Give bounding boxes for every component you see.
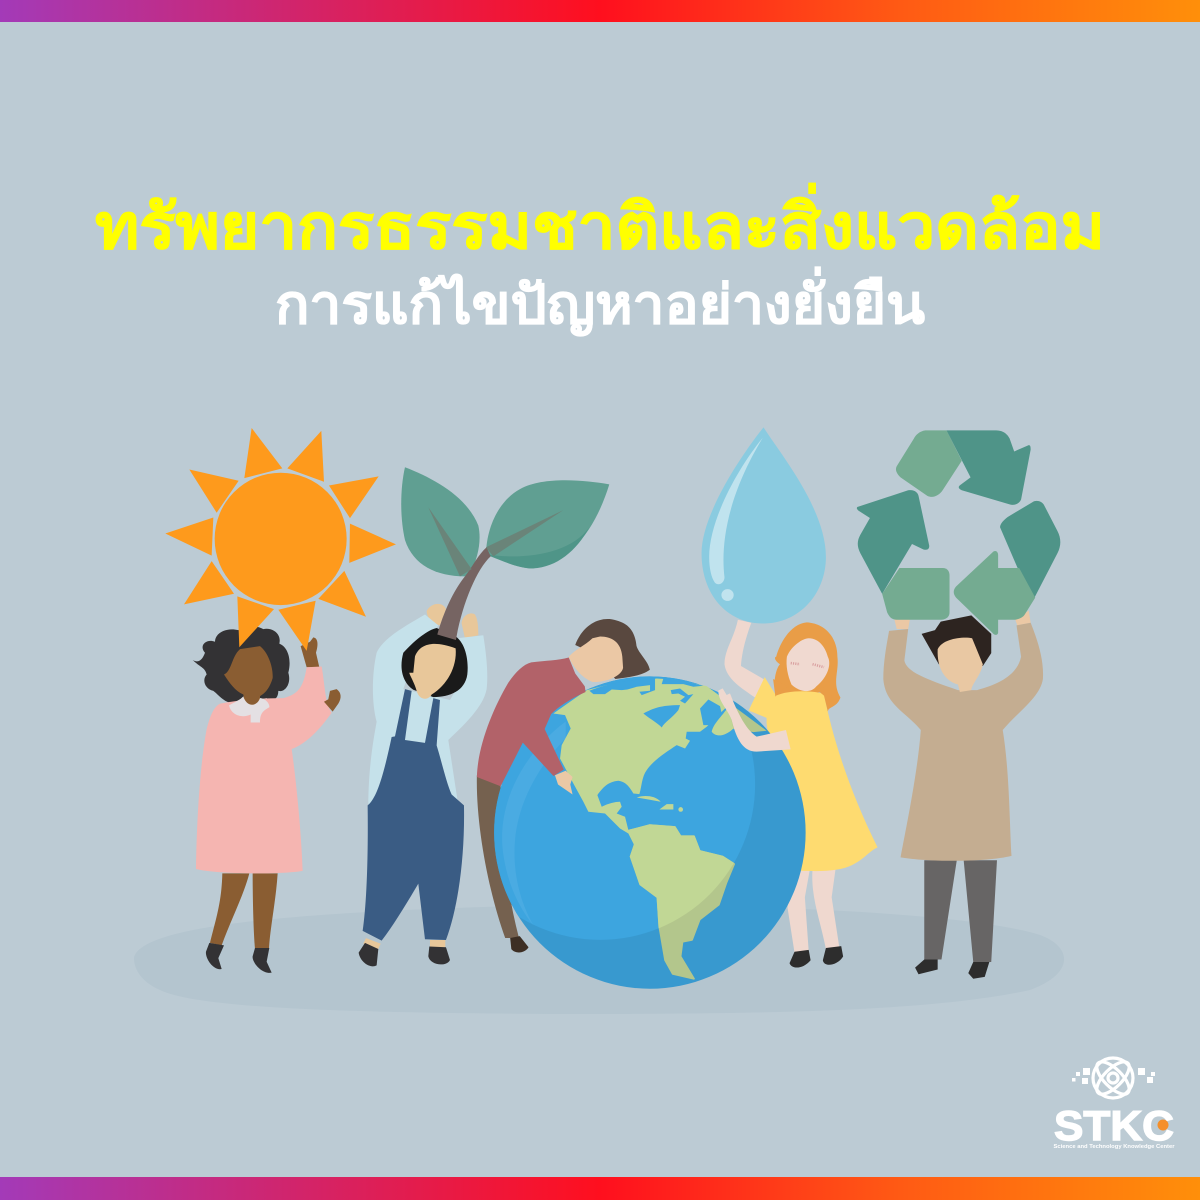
south america shaded	[629, 825, 734, 979]
legs	[788, 870, 839, 953]
left arrow tail	[882, 568, 950, 620]
dress	[749, 677, 878, 871]
right arrow tail	[1000, 501, 1060, 598]
top gradient bar	[0, 0, 1200, 22]
right arrow head	[954, 551, 1035, 635]
drop glint	[721, 589, 734, 601]
dress	[196, 667, 332, 873]
face	[787, 638, 829, 691]
sun rays	[165, 428, 396, 651]
ocean shadow	[494, 676, 806, 989]
hair strands over dress	[773, 679, 834, 712]
hair	[922, 615, 991, 666]
top arrow tail	[896, 430, 962, 497]
shirt	[477, 658, 586, 786]
hair	[775, 622, 840, 710]
trousers	[477, 775, 519, 938]
collar	[229, 696, 269, 723]
shoe	[510, 936, 529, 952]
hair	[575, 619, 650, 679]
left leaf	[401, 467, 480, 576]
face	[569, 636, 623, 682]
logo atom icon	[1092, 1057, 1134, 1099]
stem	[437, 547, 491, 640]
icon: earth globe	[494, 676, 806, 989]
shirt	[368, 615, 487, 805]
shoes	[915, 959, 989, 979]
right leaf shade	[487, 527, 589, 568]
hands	[894, 611, 1031, 629]
person: woman hugging globe, torso	[477, 619, 650, 794]
north america and arctic	[553, 678, 767, 857]
logo: STKC	[1054, 1057, 1175, 1150]
face	[409, 644, 456, 699]
icon: sun	[165, 428, 396, 651]
person: man in tan coat	[883, 611, 1043, 979]
ocean lit	[494, 676, 755, 940]
icon: water drop	[702, 427, 826, 624]
highlight crescent	[502, 722, 566, 925]
drop highlight	[709, 438, 763, 584]
person: girl in yellow dress	[724, 620, 878, 968]
trousers	[924, 860, 997, 962]
shoes	[206, 943, 272, 973]
top arrow head	[946, 430, 1031, 505]
logo dot	[1158, 1120, 1168, 1130]
arm of girl over globe	[718, 688, 791, 752]
greenland	[712, 707, 733, 735]
hair	[193, 626, 290, 703]
shaded land behind arm	[730, 703, 767, 732]
face	[224, 646, 273, 705]
shoes	[359, 943, 450, 966]
south america lit	[628, 824, 734, 928]
legs	[210, 873, 278, 949]
freckles	[791, 663, 824, 667]
ground shadow	[134, 905, 1064, 1014]
other hand	[324, 689, 341, 712]
logo pixel squares	[1072, 1068, 1155, 1084]
title: ทรัพยากรธรรมชาติและสิ่งแวดล้อม	[95, 183, 1105, 262]
face	[938, 638, 983, 692]
raised arm	[724, 620, 767, 698]
person: woman hugging globe, legs	[477, 775, 529, 952]
bottom gradient bar	[0, 1177, 1200, 1200]
overalls	[363, 689, 464, 941]
puerto rico	[678, 807, 683, 812]
left arrow head	[857, 490, 929, 594]
person: child in blue overalls	[359, 604, 487, 966]
logo wordmark: STKC	[1054, 1102, 1174, 1149]
coat	[883, 623, 1043, 861]
person: girl in pink dress	[193, 626, 341, 973]
icon: recycling arrows	[857, 430, 1060, 635]
caribbean islands	[637, 796, 673, 809]
drop body	[702, 427, 826, 624]
sun disc	[215, 473, 347, 605]
logo tagline: Science and Technology Knowledge Center	[1054, 1144, 1175, 1150]
arctic ocean and hudson bay	[589, 678, 722, 727]
north america	[553, 678, 730, 857]
icon: plant sprout	[401, 467, 609, 640]
ankles	[363, 938, 445, 949]
hands	[427, 604, 478, 638]
hand	[555, 771, 573, 794]
hair	[401, 628, 468, 697]
subtitle: การแก้ไขปัญหาอย่างยั่งยืน	[275, 266, 925, 336]
shirt chest	[397, 691, 438, 747]
right leaf	[486, 480, 609, 568]
raised hand	[301, 637, 319, 667]
leaf veins	[428, 507, 563, 576]
shoes	[790, 946, 843, 968]
